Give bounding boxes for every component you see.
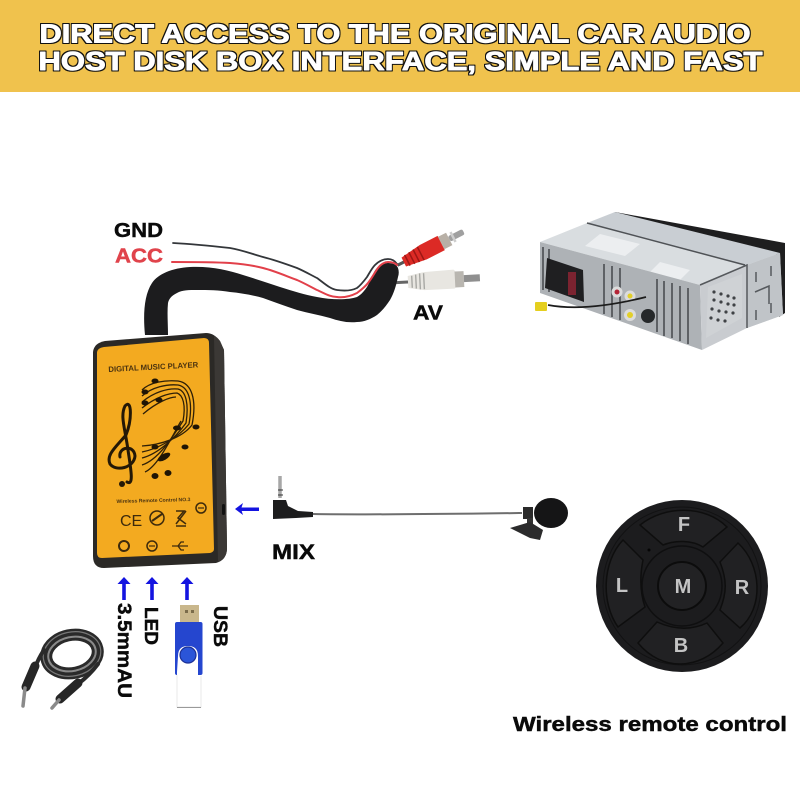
black cable (144, 263, 399, 335)
panel: yellow music player device (93, 333, 227, 568)
wiring connector (545, 258, 584, 302)
device subtitle: Wireless Remote Control NO.3 (116, 497, 191, 505)
heading (38, 18, 763, 76)
wireless remote control: M (675, 576, 691, 598)
red plug (394, 225, 467, 272)
device marks: CE, recycle, USB: CE (120, 513, 142, 530)
button: B (638, 622, 723, 664)
RCA plugs (394, 225, 480, 292)
label: AV: AV (413, 302, 443, 324)
device marks: CE, recycle, USB (119, 503, 206, 551)
arrows: bottom ports (118, 577, 194, 600)
button: F (640, 510, 727, 547)
white plug (395, 268, 480, 292)
car stereo head unit (535, 212, 785, 350)
icon: 3.5mm AUX cable (23, 626, 105, 708)
yellow lead (548, 297, 646, 307)
wireless remote control: R (735, 577, 750, 599)
icon: treble clef (109, 404, 135, 487)
device title: DIGITAL MUSIC PLAYER (108, 360, 199, 374)
label: GND: GND (114, 219, 163, 242)
RCA sockets (612, 286, 622, 298)
icon: USB flash drive (175, 605, 202, 708)
label: 3.5mmAU: 3.5mmAU (113, 603, 134, 698)
vent holes (706, 274, 742, 338)
caption: wireless remote control: Wireless remote control (513, 714, 787, 736)
label: MIX: MIX (272, 540, 316, 564)
button: M (658, 562, 706, 610)
wireless remote control: L (616, 575, 628, 597)
thin GND and ACC wires (172, 243, 397, 297)
wireless remote control (596, 500, 768, 672)
button: L (606, 540, 645, 627)
heading: DIRECT ACCESS TO THE ORIGINAL CAR AUDIO (40, 18, 750, 48)
heading: HOST DISK BOX INTERFACE, SIMPLE AND FAST (38, 46, 763, 76)
wireless remote control: F (678, 514, 690, 536)
arrow: to MIX port (235, 503, 259, 515)
wireless remote control: B (674, 635, 688, 657)
panel: header banner (0, 0, 800, 92)
label: USB: USB (209, 606, 230, 647)
microphone with jack (273, 476, 568, 540)
button: R (720, 543, 757, 628)
label: LED: LED (141, 607, 162, 645)
label: ACC: ACC (115, 244, 163, 268)
icon: music staff swirl (142, 378, 200, 479)
